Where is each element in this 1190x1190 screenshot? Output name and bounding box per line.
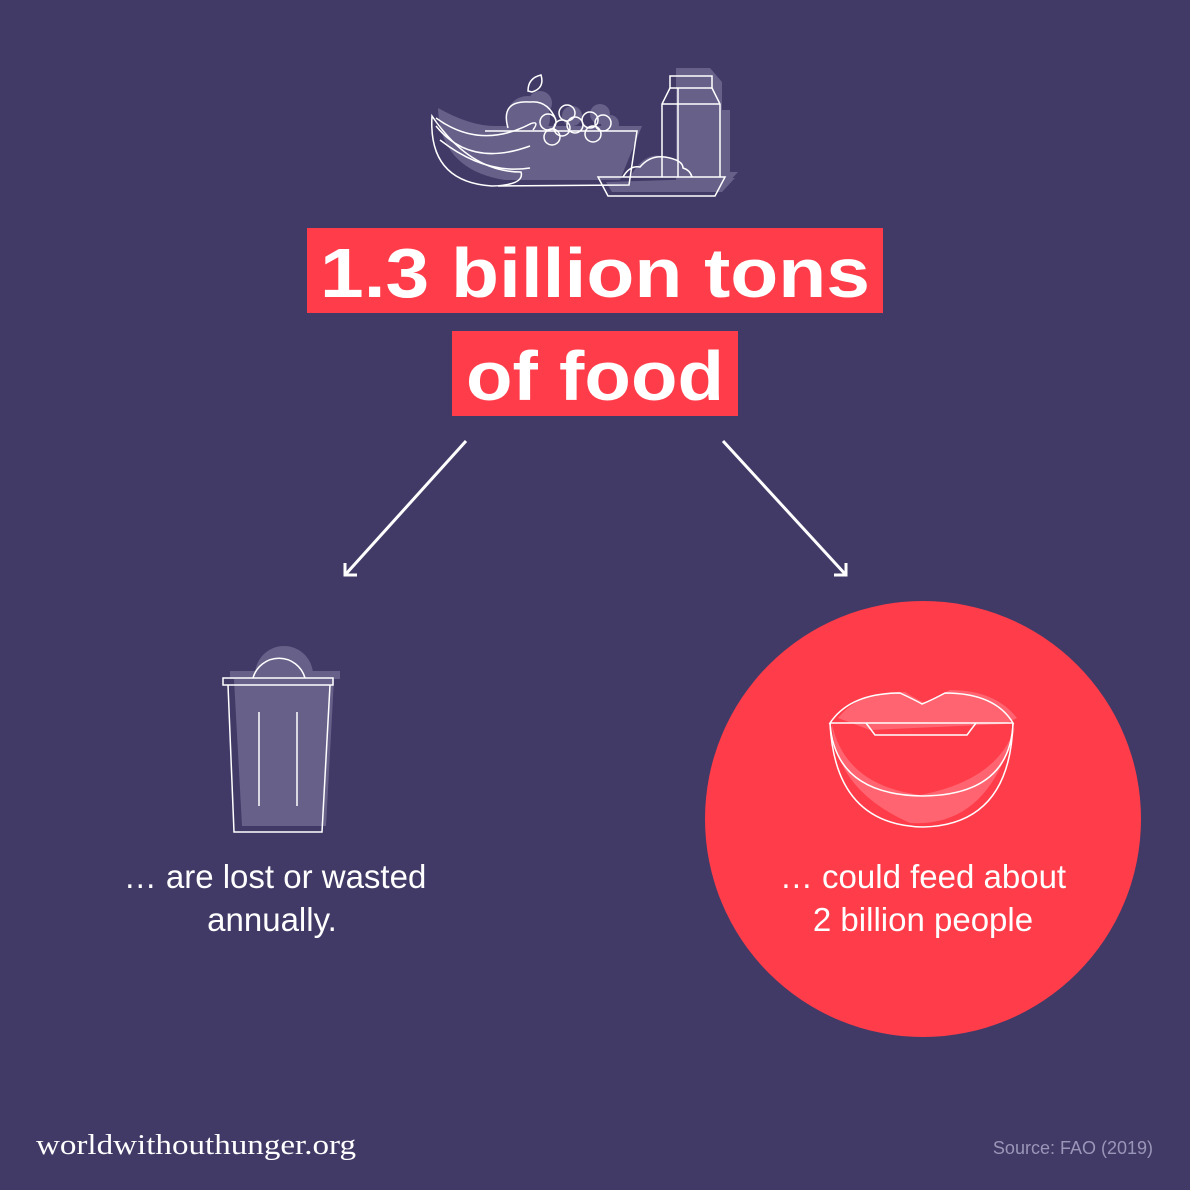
text: could feed: … could feed about (780, 858, 1066, 895)
icon: food group (432, 68, 738, 196)
footer: source: Source: FAO (2019) (993, 1138, 1153, 1158)
text: lost or wasted (124, 858, 426, 938)
icon: trash can (223, 646, 340, 832)
text: could feed: 2 billion people (813, 901, 1033, 938)
footer: website: worldwithouthunger.org (36, 1130, 356, 1161)
text: lost or wasted: … are lost or wasted (124, 858, 426, 895)
arrow: left (345, 441, 466, 575)
title line 2: of food (466, 337, 724, 415)
panel: red circle (705, 601, 1141, 1037)
arrow: right (723, 441, 846, 575)
title line 1: 1.3 billion tons (320, 234, 870, 312)
icon: mouth (830, 690, 1017, 827)
text: lost or wasted: annually. (207, 901, 337, 938)
text: could feed (780, 858, 1066, 938)
